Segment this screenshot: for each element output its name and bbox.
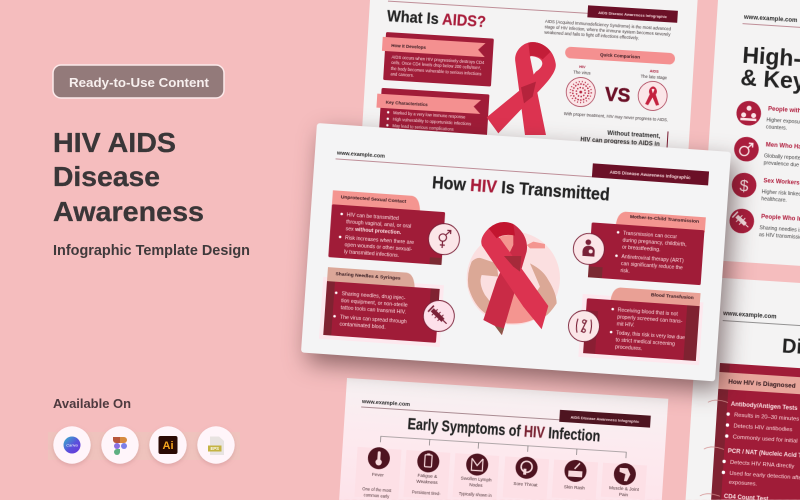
panel: how it develops: and cancers. <box>390 71 414 78</box>
symptom: muscle and joint pain <box>601 462 647 499</box>
panel: mother-to-child transmission: Mother-to-Child Transmission <box>630 214 699 225</box>
arrows: test connectors <box>700 399 728 497</box>
icon: EPS <box>197 426 235 464</box>
symptom: fever <box>354 446 402 500</box>
icon: ribbon <box>637 81 668 111</box>
group: partners <box>735 100 800 137</box>
panel: how it develops: How It Develops <box>391 43 427 50</box>
slide: high-risk groups <box>701 0 800 274</box>
panel: how HIV is diagnosed: Detects HIV antibodies <box>733 423 793 433</box>
panel: sharing needles and syringes: The virus can spread through <box>340 315 407 325</box>
icon: Canva <box>53 426 91 464</box>
panel: mother-to-child transmission <box>588 209 706 285</box>
icon: syringe <box>422 299 455 333</box>
panel: how it develops <box>380 32 494 87</box>
tree connector <box>380 436 626 458</box>
panel: key characteristics <box>374 88 489 154</box>
panel: mother-to-child transmission: during pregnancy, childbirth, <box>622 238 687 248</box>
symptom: fatigue: Persistent tired- <box>412 489 441 496</box>
header bar <box>587 5 678 23</box>
slide: diagnosis <box>686 276 800 500</box>
symptom: lymph nodes: Nodes <box>469 482 483 488</box>
badge: ready-to-use content: Ready-to-Use Content <box>69 75 210 90</box>
icon: Illustrator <box>149 426 187 464</box>
group: sex workers: healthcare. <box>761 196 787 204</box>
header rule <box>743 24 800 28</box>
main title: HIV AIDS <box>53 127 176 158</box>
symptom: fever: Fever <box>372 472 384 478</box>
shadow of main slide <box>307 133 737 391</box>
icon: Figma <box>101 426 139 464</box>
label: HIV: HIV <box>579 65 586 69</box>
slide: early symptoms <box>339 378 668 500</box>
group: sex workers <box>731 172 800 208</box>
symptom: sore throat: Sore Throat <box>513 481 538 488</box>
title: What Is AIDS? <box>387 8 486 31</box>
symptom: lymph nodes: Swollen Lymph <box>461 476 492 483</box>
website: www.example.com <box>743 15 797 24</box>
intro text <box>544 19 672 42</box>
panel: sharing needles and syringes: tion equipment, or non-sterile <box>341 298 408 309</box>
symptom: fatigue: Fatigue & <box>417 473 437 479</box>
header rule <box>388 1 588 13</box>
panel: how HIV is diagnosed: Antibody/Antigen Tests <box>731 402 798 412</box>
panel: unprotected sexual contact: through vaginal, anal, or oral <box>346 219 411 230</box>
intro text: AIDS (Acquired Immunodeficiency Syndrome) is the most advanced <box>545 19 672 31</box>
panel: key characteristics: May lead to serious complications <box>392 123 454 132</box>
ribbon: what is AIDS <box>487 42 556 135</box>
main title <box>53 127 204 227</box>
symptom: skin rash: Skin Rash <box>564 484 585 491</box>
badge: ready-to-use content <box>53 65 224 98</box>
label: HIV <box>573 65 591 76</box>
VS label: VS <box>604 85 631 107</box>
label: AIDS: AIDS <box>650 69 659 74</box>
panel: key characteristics: High vulnerability to opportunistic infections <box>393 117 471 126</box>
callout: without treatment <box>580 126 669 151</box>
panel: key characteristics: Key Characteristics <box>386 100 428 107</box>
group: partners: counters. <box>766 124 787 132</box>
callout: without treatment: HIV can progress to AIDS in <box>580 137 660 148</box>
panel: blood transfusion <box>578 285 704 365</box>
panel: mother-to-child transmission: or breastfeeding. <box>622 245 661 253</box>
panel: blood transfusion: mit HIV. <box>616 321 635 329</box>
panel: unprotected sexual contact: open wounds or other sexual- <box>344 242 413 253</box>
icon: virus <box>565 77 596 107</box>
subtitle: Infographic Template Design <box>53 243 250 259</box>
panel: sharing needles and syringes: contaminated blood. <box>339 322 386 331</box>
panel: sharing needles and syringes: Sharing needles, drug injec- <box>341 291 406 302</box>
title: How HIV Is Transmitted <box>431 172 610 205</box>
slide: what is AIDS <box>355 0 698 260</box>
panel: blood transfusion: Blood Transfusion <box>651 292 694 301</box>
header bar <box>592 163 709 185</box>
illustration: globe with awareness ribbon <box>467 222 560 335</box>
symptom: fatigue: Weakness <box>416 479 438 485</box>
slide: how HIV is transmitted <box>301 123 731 381</box>
panel: mother-to-child transmission: can significantly reduce the <box>621 261 683 271</box>
symptom: fever: One of the most <box>362 486 392 493</box>
panel: mother-to-child transmission: Antiretroviral therapy (ART) <box>621 254 684 264</box>
main title: Disease <box>53 161 160 192</box>
panel: unprotected sexual contact: Unprotected Sexual Contact <box>341 194 407 205</box>
globe <box>467 232 560 325</box>
symptom: lymph nodes <box>453 452 499 500</box>
icon: EPS: EPS <box>211 446 219 451</box>
header bar: AIDS Disease Awareness Infographic <box>610 170 691 180</box>
panel: blood transfusion: to strict medical screening <box>615 337 675 348</box>
symptom: skin rash <box>552 459 598 500</box>
header rule <box>336 159 592 177</box>
quick comparison pill: Quick Comparison <box>600 52 640 60</box>
panel: how HIV is diagnosed: Detects HIV RNA directly <box>730 460 795 470</box>
group: sex workers: $ <box>739 178 749 195</box>
label: AIDS: The late stage <box>640 74 668 80</box>
ribbon <box>481 222 548 335</box>
symptom: fatigue <box>403 449 450 500</box>
symptom: fever: common early <box>363 492 390 499</box>
callout: without treatment: Without treatment, <box>607 131 661 140</box>
icon: Illustrator: Ai <box>162 440 174 452</box>
group: injecting drugs <box>728 208 800 244</box>
panel: how HIV is diagnosed: Commonly used for initial <box>732 434 798 445</box>
main title: Awareness <box>53 196 204 227</box>
panel: blood transfusion: Receiving blood that is not <box>617 307 679 318</box>
panel: mother-to-child transmission: Transmission can occur <box>623 231 677 240</box>
panel: how HIV is diagnosed: exposures. <box>729 480 758 488</box>
label: HIV: The virus <box>573 70 591 76</box>
header bar <box>559 410 651 428</box>
icon: mother and child <box>572 232 605 266</box>
panel: how HIV is diagnosed <box>711 363 800 500</box>
symptom: sore throat <box>503 455 549 500</box>
symptom: muscle and joint pain: Muscle & Joint <box>609 485 640 492</box>
panel: how it develops: cells. Once CD4 levels drop below 200 cells/mm³, <box>391 60 481 71</box>
website: www.example.com <box>336 150 385 160</box>
group: men <box>733 136 800 172</box>
panel: key characteristics: Marked by a very low immune response <box>393 110 466 120</box>
website: www.example.com <box>722 311 777 321</box>
panel: sharing needles and syringes <box>319 267 445 347</box>
panel: blood transfusion: Today, this risk is very low due <box>616 330 685 341</box>
icon: blood bags <box>567 310 601 343</box>
available on heading: Available On <box>53 396 131 411</box>
label: AIDS <box>640 69 668 80</box>
symptom: muscle and joint pain: Pain <box>619 492 629 497</box>
panel: how HIV is diagnosed: Results in 20–30 minutes <box>734 412 799 423</box>
panel: unprotected sexual contact: Risk increases when there are <box>345 235 414 246</box>
panel: mother-to-child transmission: risk. <box>620 268 630 275</box>
quick comparison pill <box>565 47 675 65</box>
panel: sharing needles and syringes: tattoo tools can transmit HIV. <box>340 305 406 316</box>
icon: Canva: Canva <box>66 442 79 448</box>
panel: unprotected sexual contact <box>328 190 446 265</box>
panel: how HIV is diagnosed: How HIV is Diagnosed <box>728 379 796 390</box>
group: sex workers: Sex Workers <box>763 178 800 187</box>
software icons <box>48 426 240 464</box>
header bar: AIDS Disease Awareness Infographic <box>598 10 668 19</box>
panel: unprotected sexual contact: ly transmitted infections. <box>344 249 399 259</box>
panel: blood transfusion: procedures. <box>615 344 642 352</box>
header rule <box>361 407 560 420</box>
icon: gender symbols <box>427 223 461 256</box>
title <box>740 42 800 103</box>
panel: blood transfusion: properly screened can trans- <box>617 314 683 325</box>
title: Early Symptoms of HIV Infection <box>407 416 601 445</box>
symptom: lymph nodes: Typically shown in <box>459 491 493 498</box>
panel: how it develops: the body becomes vulnerable to serious infections <box>391 66 482 76</box>
intro text: weakened and fails to fight off infections effectively. <box>544 30 639 40</box>
intro text: stage of HIV infection, where the immune system becomes severely <box>545 24 671 37</box>
panel: how it develops: AIDS occurs when HIV progressively destroys CD4 <box>391 54 485 65</box>
header bar: AIDS Disease Awareness Infographic <box>570 415 640 424</box>
website: www.example.com <box>361 399 410 408</box>
panel: unprotected sexual contact: HIV can be transmitted <box>346 212 399 222</box>
panel: sharing needles and syringes: Sharing Needles & Syringes <box>335 271 401 282</box>
caption: With proper treatment, HIV may never progress to AIDS. <box>564 111 668 122</box>
header rule <box>723 321 800 327</box>
panel: unprotected sexual contact: sex without protection. <box>345 226 402 236</box>
